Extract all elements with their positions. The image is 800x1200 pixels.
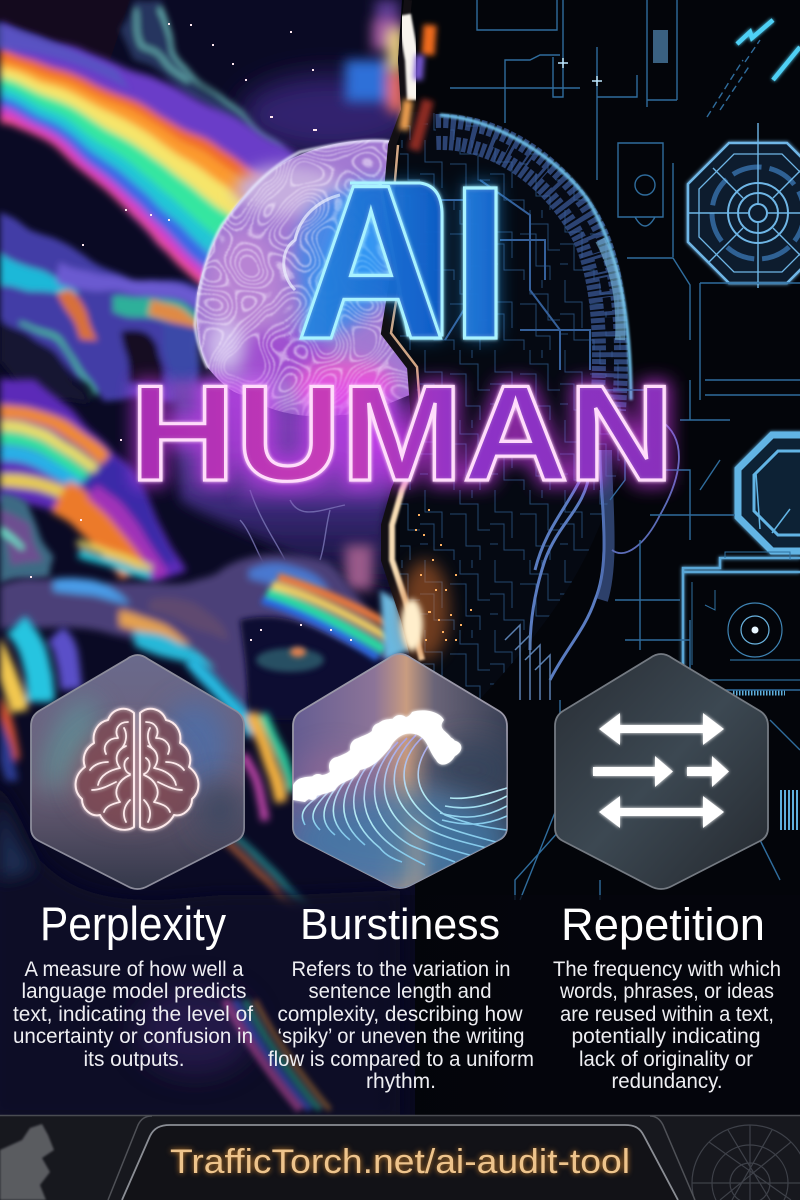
body: perplexity — [13, 958, 253, 1071]
text: I: I — [450, 142, 511, 385]
body: repetition: lack of originality or — [579, 1048, 753, 1071]
body: burstiness: flow is compared to a uniform — [268, 1048, 534, 1071]
purple wash behind text — [135, 985, 255, 1075]
body: perplexity: uncertainty or confusion in — [13, 1025, 253, 1048]
body: burstiness: Refers to the variation in — [292, 958, 510, 981]
column: repetition text — [553, 899, 781, 1093]
body: repetition: words, phrases, or ideas — [559, 980, 774, 1003]
octagon circuit lower right — [738, 435, 800, 551]
body: burstiness: sentence length and — [308, 980, 492, 1003]
body: burstiness: rhythm. — [366, 1070, 436, 1093]
title: HUMAN: HUMAN — [130, 357, 674, 509]
body: burstiness: ‘spiky’ or uneven the writing — [278, 1025, 524, 1048]
heading: perplexity: Perplexity — [40, 897, 226, 950]
footer bar — [0, 1115, 800, 1200]
column: perplexity text — [13, 897, 253, 1071]
body: repetition: The frequency with which — [553, 958, 781, 981]
right lower dark fade — [370, 895, 800, 1115]
panel: perplexity hexagon — [31, 655, 245, 889]
body: perplexity: language model predicts — [22, 980, 246, 1003]
banner frame — [122, 1125, 678, 1200]
sparks glow near crack — [401, 510, 472, 660]
body: repetition — [553, 958, 781, 1093]
neon slashes top right — [737, 20, 800, 80]
brain contour folds — [196, 140, 410, 416]
rainbow sheen on hexagon — [33, 692, 245, 840]
faint rainbow near footer — [225, 1000, 330, 1110]
dark cosmic pocket with nebula — [240, 617, 400, 720]
brain base shape — [196, 140, 410, 416]
column: burstiness text — [268, 900, 534, 1093]
body: repetition: potentially indicating — [572, 1025, 760, 1048]
text: A: A — [296, 139, 446, 385]
human brain — [195, 140, 410, 500]
lump blocks near crack — [345, 545, 373, 590]
body: perplexity: A measure of how well a — [24, 958, 244, 981]
icon: wave — [290, 710, 515, 890]
blue jaw ribbons — [530, 450, 604, 680]
icon: repetition arrows — [593, 713, 729, 828]
rainbow swirl lower left — [0, 625, 310, 920]
octagon circuit top right — [688, 123, 800, 288]
body: burstiness: complexity, describing how — [278, 1003, 523, 1026]
top crack fire — [404, 15, 414, 100]
wave foam — [293, 710, 461, 802]
brain rim — [195, 141, 392, 368]
url label: TrafficTorch.net/ai-audit-tool — [170, 1143, 630, 1181]
icon: brain — [76, 709, 198, 830]
heading: burstiness: Burstiness — [300, 900, 500, 949]
sparkles — [30, 24, 352, 640]
small rainbow by crack — [262, 577, 398, 658]
dense circuit rim — [436, 132, 610, 410]
lower rainbow band — [0, 378, 185, 585]
rainbow band upper — [0, 20, 300, 290]
circuit head — [400, 112, 679, 720]
body: burstiness — [268, 958, 534, 1093]
cosmic purple glow — [240, 75, 420, 155]
body: repetition: are reused within a text, — [560, 1003, 774, 1026]
heading: repetition: Repetition — [561, 899, 765, 950]
glass blob left — [0, 490, 55, 590]
neon halo for AI — [298, 183, 498, 338]
liquid purple mass — [0, 554, 400, 720]
top circuit traces — [450, 0, 800, 900]
title: HUMAN: HUMAN — [130, 357, 674, 509]
body: perplexity: its outputs. — [84, 1048, 184, 1071]
map silhouette — [0, 1124, 54, 1200]
blue patch beside crack — [380, 590, 410, 660]
panel: repetition hexagon — [555, 654, 768, 889]
crack with torn edge — [385, 0, 430, 660]
HUMAN backdrop purple — [240, 395, 410, 500]
panel circuit lower right — [683, 552, 800, 810]
radar graphic — [692, 1125, 800, 1200]
panel: burstiness hexagon — [290, 654, 515, 890]
brain colour mottling — [207, 165, 395, 411]
title: AI — [296, 139, 511, 385]
body: repetition: redundancy. — [612, 1070, 722, 1093]
shoulder of stylised A — [350, 183, 442, 335]
blurred light bar by crack — [345, 0, 404, 112]
neon dense bars — [653, 30, 668, 63]
face below brain — [170, 380, 400, 590]
star nodes — [558, 58, 602, 86]
background: human iridescent side — [0, 0, 415, 1115]
iridescent sheet middle — [0, 213, 200, 400]
lower dark navy field — [0, 802, 314, 925]
glass ribbon at top — [118, 0, 286, 150]
body: perplexity: text, indicating the level of — [13, 1003, 253, 1026]
